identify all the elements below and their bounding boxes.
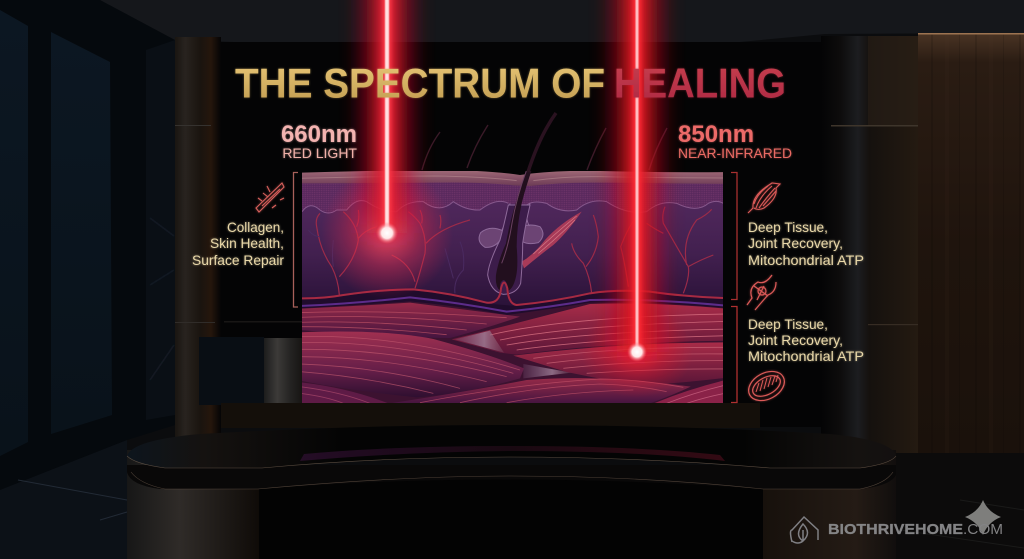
label: 850nm near-infrared [678,121,792,161]
laser glow: red light [321,0,453,299]
text: deep tissue benefits 1: Joint Recovery, [748,235,843,251]
epidermis speckled layer [302,182,723,212]
deep purple vessel [300,297,730,312]
bracket: near-infrared lower [731,306,737,402]
tendon highlights [455,331,504,353]
window pane left [0,10,28,456]
icon: mitochondrion [744,366,789,406]
dermis [300,201,730,307]
follicle sheath [488,205,530,294]
watermark logo: .COM [963,521,1003,538]
bracket: near-infrared upper [731,172,737,300]
hair shaft and bulb [496,171,532,290]
title: THE SPECTRUM OF [235,60,605,106]
muscle base [300,301,730,403]
label: 850nm near-infrared: NEAR-INFRARED [678,145,792,161]
deep dark band under dermis [300,290,730,317]
hairs above skin [422,113,667,172]
muscle bundle top-left [300,303,520,338]
watermark logo [790,500,1003,543]
muscle bundle mid-right [513,342,730,385]
text: deep tissue benefits 1: Deep Tissue, [748,219,828,235]
text: deep tissue benefits 2 [748,316,864,364]
panel: skin cross-section [300,160,730,403]
text: deep tissue benefits 1 [748,219,864,268]
muscle bundle mid-left [300,331,524,397]
text: collagen benefits [192,219,284,268]
main blood vessel [300,282,730,305]
central dark screen wall [221,42,821,427]
left wall [0,0,175,490]
label: 850nm near-infrared: 850nm [678,121,754,148]
text: deep tissue benefits 2: Mitochondrial ATP [748,348,864,364]
icon: collagen fibre [256,183,284,212]
text: collagen benefits: Surface Repair [192,252,284,268]
wordmark: BIOTHRIVEHOME [828,521,963,538]
back counter behind desk [199,321,760,428]
marble wall section [146,40,175,420]
text: deep tissue benefits 1: Mitochondrial ATP [748,252,864,268]
window pane right [51,32,112,434]
icon: joint [747,275,776,310]
desk top surface [127,425,896,468]
desk body centre [259,479,763,559]
capillaries [316,207,713,295]
sebaceous gland ducts and lobes [479,225,543,247]
ceiling [100,0,1024,44]
label: 660nm red light: 660nm [281,121,357,148]
bracket: red light range [294,172,298,307]
muscle bundle upper right [452,304,730,355]
sparkle [965,500,1001,535]
text: collagen benefits: Skin Health, [210,235,284,251]
dermis wave outline [302,201,723,213]
text: collagen benefits: Collagen, [227,219,284,235]
title: HEALING [614,60,786,106]
label: 660nm red light: RED LIGHT [282,145,357,161]
muscle bundle bottom-right [655,380,723,403]
muscle bundle bottom-centre [390,378,691,403]
label: 660nm red light [281,121,357,161]
wood panel [918,33,1024,453]
arrector muscle [522,212,582,268]
muscle bundle bottom-left [300,382,388,403]
laser glow: near-infrared [581,0,693,398]
text: deep tissue benefits 2: Joint Recovery, [748,332,843,348]
icon: muscle [748,183,780,213]
desk [127,425,896,559]
desk upper band [127,465,896,489]
stratum corneum [300,170,730,186]
desk body sides [127,450,259,559]
icon: house with leaf [790,517,818,543]
left column [175,37,221,447]
floor [0,440,127,559]
right column [821,36,918,453]
text: deep tissue benefits 2: Deep Tissue, [748,316,828,332]
